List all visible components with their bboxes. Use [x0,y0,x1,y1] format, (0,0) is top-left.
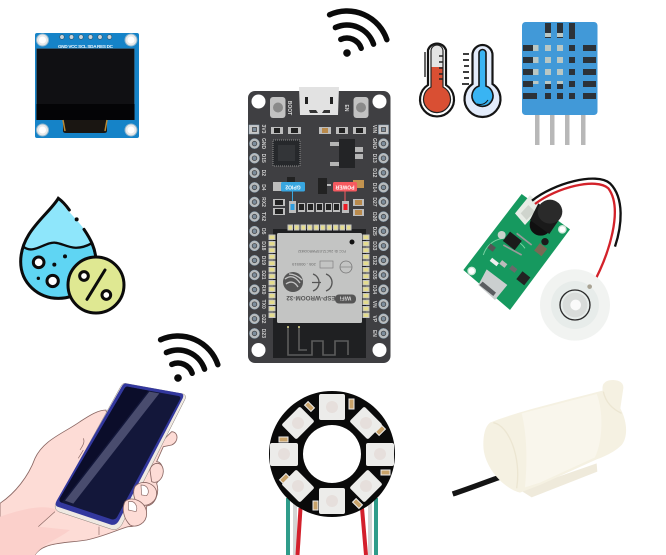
cable [453,476,503,494]
right pin labels: D32 [371,256,377,265]
ESP-WROOM-32 module: ESP-WROOM-32 [286,294,336,301]
icon: blue thermometer [462,45,500,117]
icon: humidity drop with percent [21,198,124,313]
right pin labels: D12 [371,168,377,178]
end cap seam [493,423,518,488]
pump silhouette [483,380,626,493]
right pin labels: D34 [371,285,377,294]
icon: mini water pump [453,380,626,497]
small components row [271,127,366,134]
piezo disc [540,269,610,341]
left pin labels: TX0 [260,300,266,309]
icon: humidifier driver board and piezo disc [463,179,621,341]
left pin labels: GND [260,138,266,150]
right pin labels: D14 [371,183,377,192]
ESP-WROOM-32 module [269,225,369,358]
left pin labels: RX2 [260,197,266,207]
left pin labels [260,125,266,338]
capacitor [530,214,552,236]
buttons [270,97,368,118]
inductor and chips [503,232,522,250]
outlet shading [603,392,622,413]
icon: red thermometer [420,44,454,116]
ESP-WROOM-32 module: 205 - 000519 [291,262,316,267]
left header pins [249,125,260,338]
left pin labels: D2 [260,170,266,176]
icon: ESP32 development board [248,87,390,363]
left pin labels: D5 [260,228,266,235]
micro USB port [478,269,507,300]
JST connector [515,195,542,225]
right pin labels: D25 [371,227,377,236]
icon: DHT11 sensor [522,22,598,145]
wires [288,498,376,555]
body highlight [522,394,601,487]
icon: bottom wifi signal [148,327,223,394]
buttons: EN [343,105,349,112]
fingers over phone edge [134,482,157,505]
left pin labels: RX0 [260,285,266,295]
left pin labels: D4 [260,184,266,191]
LEDs [270,394,394,514]
mounting holes [252,94,386,357]
right pin labels: EN [371,330,377,337]
POWER label: POWER [335,183,354,189]
PCB [463,194,570,310]
right pin labels: VN [371,301,377,308]
GPIO2 label: GPIO2 [285,183,301,189]
right pin labels: D33 [371,241,377,251]
right pin labels [371,125,377,337]
left pin labels: D23 [260,329,266,338]
right pin labels: VIN [371,125,377,134]
icon: hand holding smartphone [0,383,186,555]
left pin labels: D19 [260,256,266,265]
right pin labels: D26 [371,212,377,221]
ESP-WROOM-32 module: WiFi [339,294,351,300]
right header pins [378,125,388,338]
USB bridge chip [273,140,300,166]
micro USB connector [299,87,339,115]
hand [0,410,177,555]
left pin labels: TX2 [260,212,266,221]
percent badge [68,257,124,313]
board body [248,91,390,363]
left pin labels: D15 [260,154,266,163]
voltage regulator [330,139,363,168]
status LEDs and resistors [273,199,364,216]
icon: OLED display module: GND VCC SCL SDA RES DC [58,44,114,49]
buttons: BOOT [286,101,292,115]
ESP-WROOM-32 module: FCC ID: 2AC7Z-ESPWROOM32 [298,249,346,253]
small capacitors [279,399,390,510]
right pin labels: D13 [371,154,377,163]
icon: top wifi signal [317,2,392,69]
foot [520,463,597,497]
left pin labels: 3V3 [260,125,266,134]
black ring [269,391,395,517]
left pin labels: D22 [260,314,266,324]
icon: NeoPixel LED ring [269,391,395,555]
icon: OLED display module [35,33,139,138]
GPIO2 label [273,177,305,203]
right pin labels: VP [371,315,377,323]
right pin labels: D27 [371,197,377,207]
right pin labels: D35 [371,270,377,280]
POWER label [318,178,364,203]
phone body [55,383,186,530]
phone screen [59,387,180,519]
wires [532,179,621,247]
left pin labels: D18 [260,241,266,251]
right pin labels: GND [371,138,377,150]
left pin labels: D21 [260,270,266,280]
